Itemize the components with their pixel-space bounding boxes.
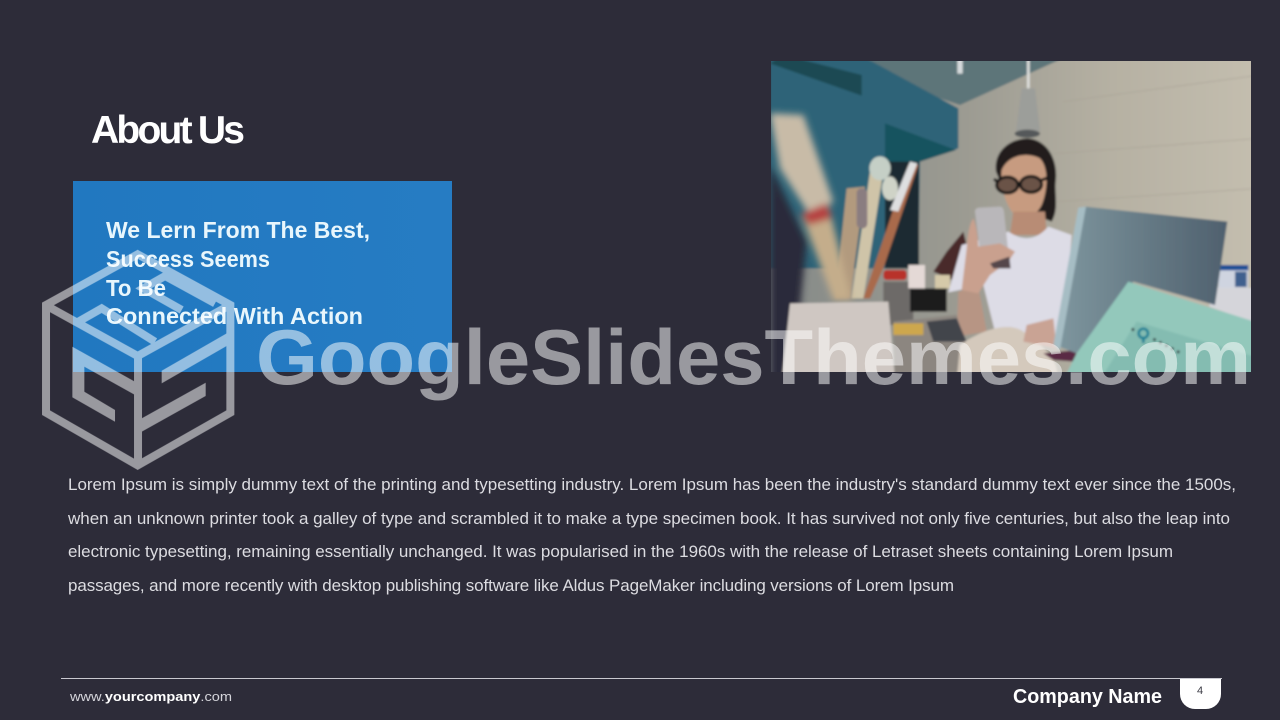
green folder	[1066, 280, 1251, 372]
watermark	[46, 254, 1251, 465]
white box and blue carton	[1208, 264, 1251, 322]
pens and brushes cup	[835, 156, 918, 298]
glasses	[994, 176, 1048, 193]
headline text: Success Seems	[106, 246, 270, 272]
headline text: We Lern From The Best,	[106, 217, 370, 243]
footer website: www. yourcompany .com	[69, 689, 232, 704]
page number tab: 4	[1197, 685, 1203, 697]
body paragraph	[67, 475, 1236, 595]
title: About Us	[91, 109, 245, 152]
photo: woman with phone at a laptop	[770, 55, 1260, 380]
panel: blue headline card	[73, 181, 452, 372]
headline text: To Be	[106, 275, 166, 301]
body paragraph: electronic typesetting, remaining essentially unchanged. It was popularised in the 1960s with the release of Letraset sheets containing Lorem Ipsum	[68, 542, 1173, 561]
footer rule	[61, 678, 1222, 679]
headline text	[106, 217, 370, 329]
laptop	[1053, 207, 1227, 353]
icon: hexagonal cube logo	[46, 254, 230, 465]
woman	[948, 138, 1072, 342]
desk clutter	[892, 315, 1077, 372]
body paragraph: passages, and more recently with desktop publishing software like Aldus PageMaker including versions of Lorem Ipsum	[68, 576, 954, 595]
headline text: Connected With Action	[106, 303, 363, 329]
body paragraph: when an unknown printer took a galley of type and scrambled it to make a type specimen book. It has survived not only five centuries, but also the leap into	[67, 509, 1230, 528]
phone and hand	[962, 207, 1015, 293]
footer company name: Company Name	[1013, 686, 1162, 708]
wordmark: GoogleSlidesThemes.com	[256, 313, 1251, 401]
page number tab	[1180, 679, 1221, 709]
hanging lamp	[1015, 55, 1040, 138]
body paragraph: Lorem Ipsum is simply dummy text of the printing and typesetting industry. Lorem Ipsum has been the industry's standard dummy text ever since the 1500s,	[68, 475, 1236, 494]
shelf items	[883, 232, 967, 325]
